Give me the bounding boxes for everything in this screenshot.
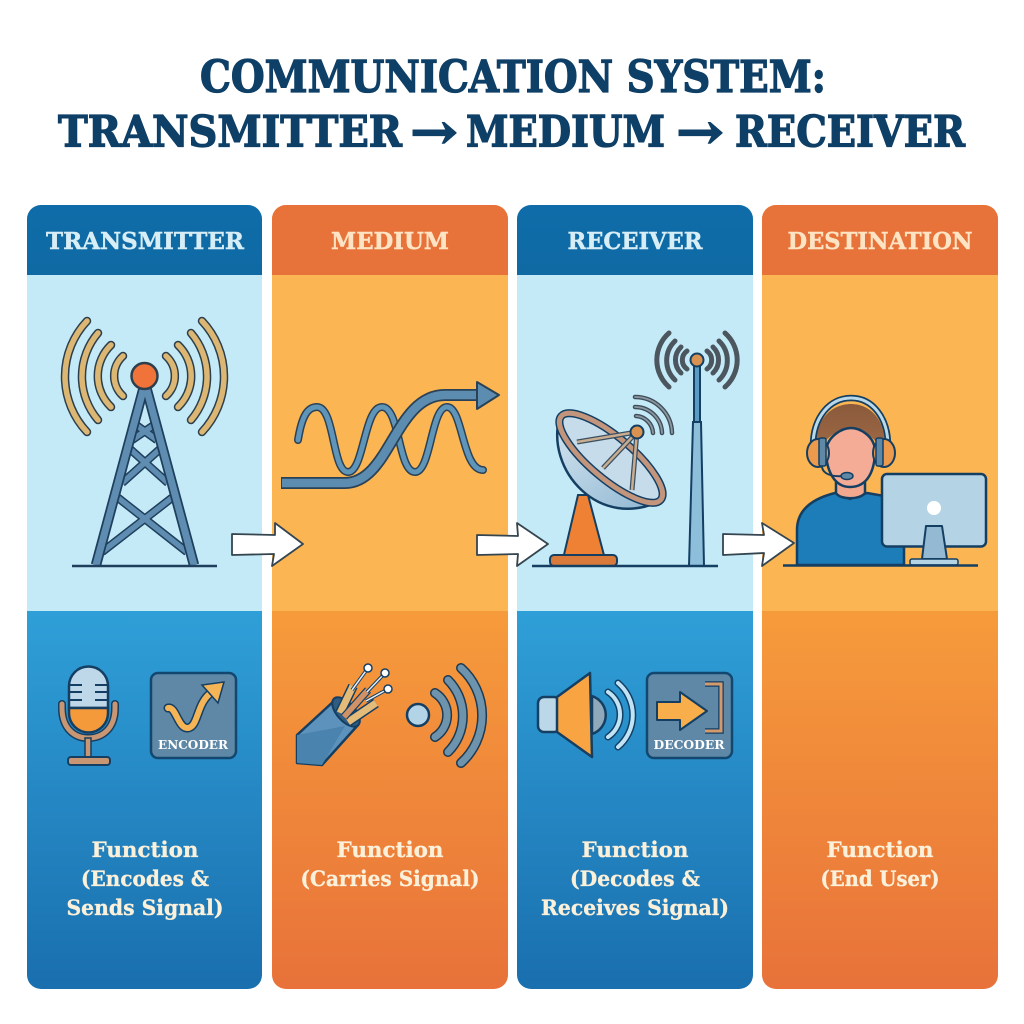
heading: destination: DESTINATION — [788, 228, 972, 255]
title: MEDIUM — [466, 108, 665, 158]
text: receiver function: (Decodes & — [570, 866, 700, 891]
panel: medium — [272, 205, 508, 989]
icon: radio tower — [65, 321, 224, 566]
text: medium function: (Carries Signal) — [300, 866, 480, 891]
text: transmitter function: Sends Signal) — [66, 895, 224, 920]
icon: encoder box: ENCODER — [158, 738, 229, 752]
icon: decoder box — [647, 673, 732, 758]
panel: destination — [762, 205, 998, 989]
heading: medium: MEDIUM — [331, 228, 449, 255]
arrow: transmitter to medium — [232, 523, 303, 566]
title: COMMUNICATION SYSTEM: — [200, 52, 826, 103]
title — [58, 52, 965, 161]
text: medium function: Function — [336, 837, 444, 862]
icon: encoder box — [151, 673, 236, 758]
text: receiver function — [541, 837, 729, 920]
heading: receiver: RECEIVER — [568, 228, 703, 255]
icon: fiber optic cable — [297, 664, 392, 765]
heading: transmitter: TRANSMITTER — [46, 228, 245, 255]
title: → — [410, 102, 458, 161]
icon: satellite dish — [548, 397, 674, 566]
panel: transmitter — [27, 205, 262, 989]
title: → — [676, 102, 724, 161]
icon: microphone — [62, 667, 115, 765]
text: transmitter function: Function — [92, 837, 198, 862]
icon: receiving mast — [532, 333, 737, 566]
text: destination function — [820, 837, 940, 891]
icon: signal wave and arrow — [281, 382, 499, 483]
title: RECEIVER — [735, 108, 965, 158]
icon: speaker — [538, 673, 633, 757]
icon: wireless signal — [407, 668, 482, 763]
text: transmitter function — [66, 837, 224, 920]
arrow: receiver to destination — [723, 523, 794, 566]
arrow: medium to receiver — [477, 523, 548, 566]
text: destination function: Function — [826, 837, 934, 862]
title: TRANSMITTER — [58, 108, 402, 158]
panel: receiver — [517, 205, 753, 989]
text: medium function — [300, 837, 480, 891]
text: destination function: (End User) — [820, 866, 940, 891]
icon: decoder box: DECODER — [654, 738, 726, 752]
icon: person with headset at computer — [783, 398, 986, 566]
text: receiver function: Function — [582, 837, 688, 862]
text: transmitter function: (Encodes & — [81, 866, 209, 891]
text: receiver function: Receives Signal) — [541, 895, 729, 920]
